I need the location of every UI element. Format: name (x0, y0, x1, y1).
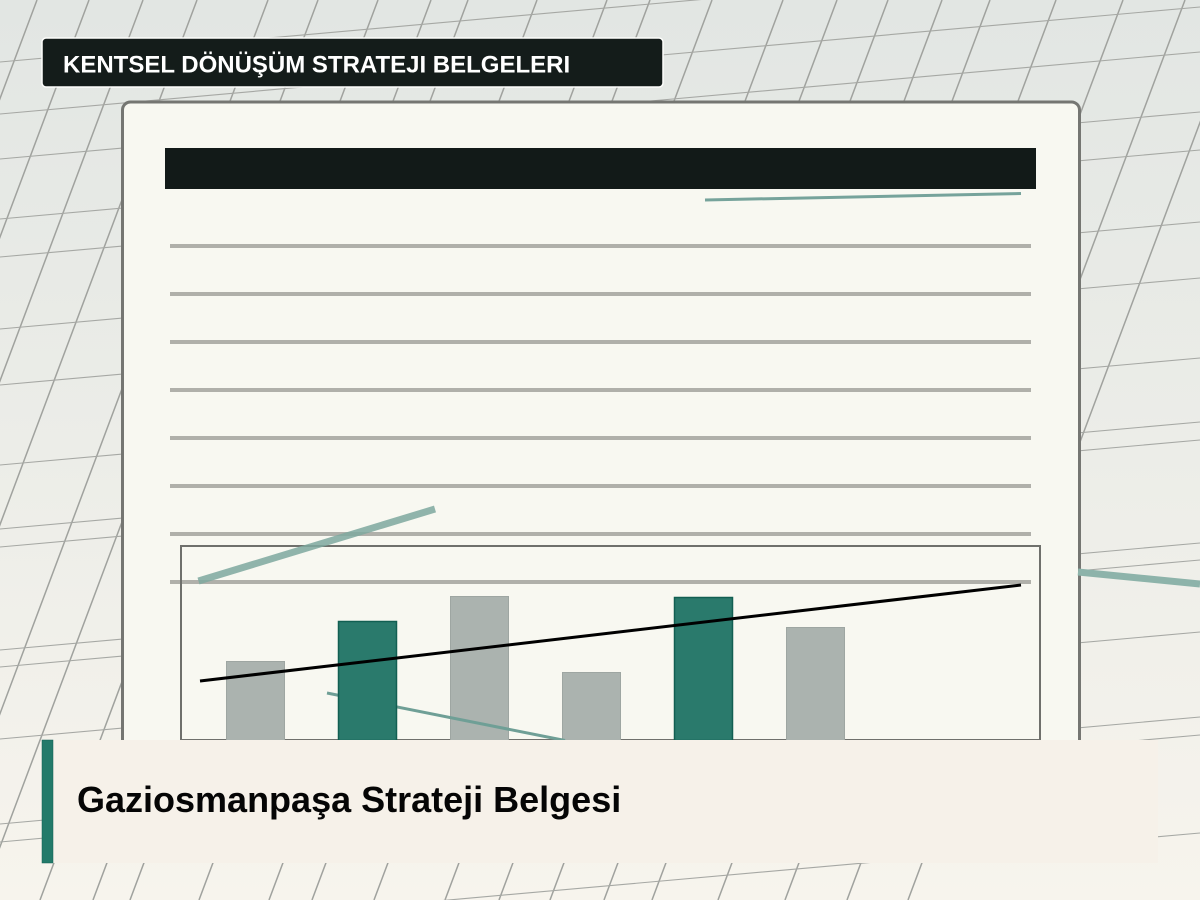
thick teal accent right (1078, 572, 1200, 584)
document title bar (165, 148, 1036, 189)
teal accent bar (42, 740, 53, 863)
header label: KENTSEL DÖNÜŞÜM STRATEJI BELGELERI (63, 52, 570, 78)
thin teal accent under title bar (705, 194, 1021, 200)
thick teal accent left (198, 509, 435, 581)
bar chart (181, 546, 1040, 740)
teal bars (338, 598, 732, 740)
caption banner (42, 740, 1158, 863)
black trend line (200, 585, 1021, 681)
caption title: Gaziosmanpaşa Strateji Belgesi (77, 779, 621, 820)
document panel (122, 102, 1080, 802)
header label (42, 38, 663, 87)
document text lines (170, 244, 1031, 584)
thin teal diagonal (327, 693, 565, 740)
chart frame (181, 546, 1040, 740)
grey bars (226, 596, 844, 740)
